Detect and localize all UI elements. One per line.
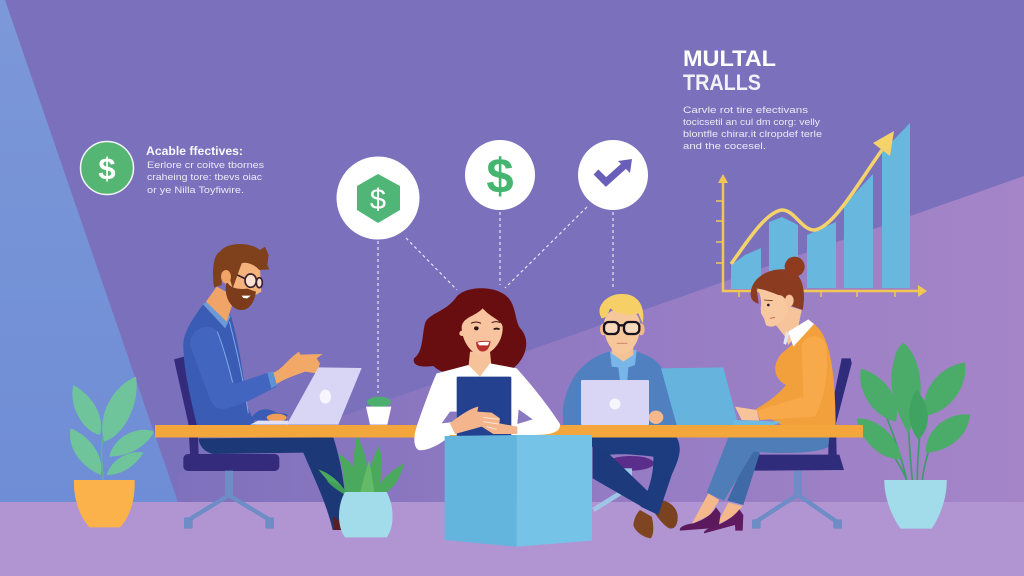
- mouth: [617, 342, 627, 345]
- hair: [213, 244, 269, 288]
- lighter wall panel: [178, 176, 1024, 510]
- mouth: [476, 341, 491, 351]
- forearm hand on table: [250, 409, 287, 422]
- sleeve: [757, 336, 827, 420]
- leg: front: [592, 437, 680, 515]
- table: [155, 425, 863, 438]
- beard: [226, 280, 256, 310]
- jacket: [563, 352, 677, 425]
- neck: [775, 305, 802, 345]
- hand: [273, 352, 323, 384]
- ear: [221, 270, 231, 283]
- text block: right: Carvle rot tire efectivans: [683, 105, 808, 116]
- laptop: bearded man: [250, 367, 362, 425]
- sweater: [755, 324, 836, 425]
- trend arrow: [731, 131, 894, 264]
- glasses: [604, 322, 639, 334]
- neck: [468, 352, 492, 378]
- chair: [750, 358, 852, 529]
- text block: right: tocicsetil an cul dm corg: velly: [683, 117, 820, 128]
- hair: [599, 294, 643, 323]
- blue wall triangle: [0, 0, 178, 502]
- legs: [198, 437, 347, 530]
- shoe: [333, 516, 345, 530]
- chair: [174, 357, 279, 529]
- hair bun: [785, 257, 805, 277]
- text block: left: craheing tore: tbevs oiac: [147, 172, 262, 183]
- chart axes: [716, 174, 927, 297]
- laptop: [661, 367, 782, 425]
- face: [223, 258, 261, 298]
- plant: right: [857, 343, 970, 529]
- text block: right: [683, 105, 822, 152]
- hand: [735, 407, 759, 421]
- hair: [414, 288, 526, 374]
- shoes: [655, 500, 678, 529]
- text block: right: blontfle chirar.it clropdef terle: [683, 129, 822, 140]
- brows: [471, 322, 500, 323]
- tablet: [457, 377, 511, 436]
- ear: [459, 331, 465, 336]
- text block: right: and the cocesel.: [683, 141, 766, 152]
- collar: [203, 302, 231, 328]
- eye and mouth: [764, 300, 775, 318]
- shoes: [680, 507, 721, 531]
- hand: [649, 411, 663, 424]
- face: [757, 287, 788, 327]
- person: woman in orange: [661, 257, 852, 533]
- heading: right: MULTAL: [683, 46, 776, 71]
- arm gaps: [442, 409, 533, 424]
- laptop: glasses man: [581, 380, 649, 425]
- blue pot: [884, 480, 947, 529]
- stems: [873, 383, 940, 480]
- person: woman with tablet: [414, 288, 560, 450]
- eyes: [474, 326, 500, 330]
- leg: back: [593, 445, 650, 508]
- hands: [450, 407, 517, 434]
- neck: [612, 345, 633, 362]
- icon: check arrow: [578, 140, 648, 210]
- icon: green dollar badge: [80, 142, 134, 194]
- cuff: [267, 371, 277, 388]
- glasses: [237, 274, 262, 288]
- floor: [0, 502, 1024, 576]
- sleeve: [190, 327, 277, 409]
- face: [462, 308, 503, 355]
- leaves: [857, 343, 970, 459]
- icon: green dollar: $: [486, 150, 514, 204]
- ankles: [692, 493, 719, 524]
- text block: left: or ye Nilla Toyfiwire.: [147, 185, 244, 196]
- heading: right: [683, 46, 776, 95]
- face: [604, 308, 640, 354]
- text block: left: Eerlore cr coitve tbornes: [147, 160, 264, 171]
- text block: left: Acable ffectives:: [146, 146, 243, 158]
- shirt: [610, 350, 637, 381]
- heading: right: TRALLS: [683, 70, 761, 95]
- leg: back: [727, 450, 760, 505]
- torso: [183, 304, 257, 427]
- chart bars: [731, 123, 910, 289]
- round pot: [339, 492, 393, 537]
- box: podium: [445, 435, 592, 547]
- dashed connector lines: [378, 207, 613, 393]
- icon: green dollar badge: $: [98, 151, 116, 186]
- icon: green dollar: [465, 140, 535, 210]
- icon: hexagon dollar: $: [370, 184, 386, 216]
- leg: front: [707, 437, 829, 501]
- orange pot: [74, 480, 135, 527]
- collar: [788, 319, 814, 347]
- icon: hexagon dollar: [336, 156, 420, 240]
- shirt seam: [229, 322, 248, 413]
- plant: table cactus: [366, 397, 391, 425]
- plant: small floor plant: [318, 435, 404, 537]
- person: man with glasses (body and legs): [563, 294, 680, 538]
- blouse: [414, 363, 560, 450]
- person: bearded man: [174, 244, 347, 530]
- spiky leaves: [318, 435, 404, 496]
- bar chart: [716, 123, 927, 297]
- text block: left: [146, 146, 264, 196]
- neck: [206, 287, 235, 322]
- plant: left: [70, 377, 154, 527]
- hair: [751, 269, 804, 310]
- ear: [785, 295, 794, 307]
- chair: [593, 456, 663, 510]
- leaves: [70, 377, 154, 475]
